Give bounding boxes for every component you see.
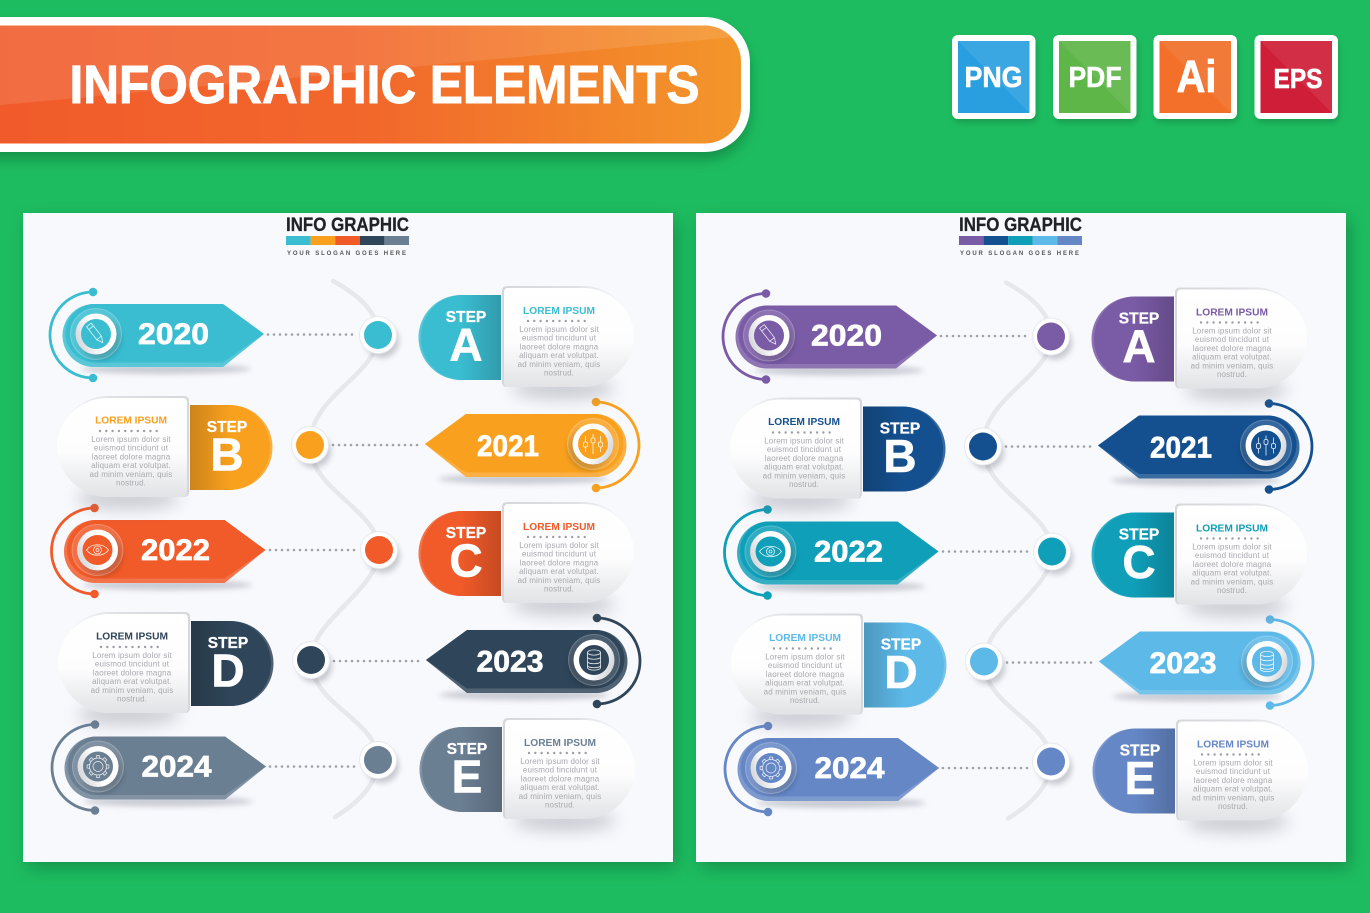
- step C: STEP: [1119, 526, 1159, 544]
- year tag 2021: [1098, 399, 1312, 494]
- year tag 2024: 2024: [142, 750, 212, 784]
- step C: C: [1122, 536, 1156, 588]
- year tag 2020: 2020: [811, 320, 882, 352]
- year tag 2022: 2022: [814, 536, 883, 568]
- panel header: [959, 215, 1082, 257]
- step B: B: [883, 430, 917, 482]
- year tag 2021: 2021: [477, 430, 539, 463]
- step A: STEP: [1119, 310, 1159, 328]
- step A: [1092, 288, 1307, 401]
- step B: B: [210, 428, 244, 480]
- format badge: EPS: EPS: [1274, 63, 1322, 94]
- year tag 2020: 2020: [138, 318, 209, 351]
- format badge: PNG: PNG: [964, 62, 1022, 94]
- step A: A: [449, 318, 483, 370]
- timeline wave: [310, 281, 379, 817]
- format badge: PDF: PDF: [1068, 62, 1122, 94]
- timeline nodes: [964, 318, 1073, 784]
- step B: STEP: [880, 420, 920, 438]
- year tag 2023: [426, 614, 640, 708]
- step A: STEP: [446, 309, 486, 326]
- step B: LOREM IPSUM: [768, 417, 840, 428]
- step B: LOREM IPSUM: [95, 416, 167, 426]
- year tag 2021: 2021: [1150, 432, 1212, 464]
- year tag 2022: 2022: [141, 534, 210, 567]
- step C: [418, 502, 634, 616]
- step E: [420, 718, 635, 832]
- year tag 2022: [52, 504, 266, 598]
- step D: D: [211, 644, 245, 696]
- panel: right infographic: [696, 213, 1350, 868]
- connector: dotted lines: [268, 334, 423, 766]
- title banner: INFOGRAPHIC ELEMENTS: [70, 55, 700, 115]
- panel header: [286, 215, 409, 257]
- step A: LOREM IPSUM: [1196, 308, 1268, 318]
- step C: [1092, 504, 1307, 617]
- step B: [57, 396, 272, 510]
- step D: STEP: [881, 636, 921, 654]
- panel header: INFO GRAPHIC: [959, 215, 1082, 236]
- panel content: [723, 282, 1313, 833]
- step E: STEP: [1120, 742, 1160, 760]
- step D: [731, 614, 946, 727]
- step D: LOREM IPSUM: [96, 632, 168, 642]
- step A: [418, 286, 634, 400]
- year tag 2024: 2024: [814, 752, 885, 785]
- year tag 2023: 2023: [1150, 647, 1216, 680]
- step E: E: [452, 750, 482, 802]
- step C: LOREM IPSUM: [523, 522, 595, 533]
- step D: [58, 612, 274, 726]
- year tag 2024: [725, 722, 939, 816]
- year tag 2023: [1099, 615, 1313, 710]
- format badge: PNG: [952, 35, 1037, 123]
- year tag 2024: [52, 720, 266, 815]
- step C: LOREM IPSUM: [1196, 524, 1268, 534]
- step E: LOREM IPSUM: [524, 738, 596, 749]
- step B: STEP: [207, 419, 247, 436]
- format badge: Ai: [1154, 35, 1238, 123]
- step D: D: [884, 646, 918, 698]
- step E: [1092, 720, 1308, 833]
- step E: LOREM IPSUM: [1197, 740, 1269, 750]
- step C: STEP: [446, 525, 486, 542]
- connector: dotted lines: [941, 336, 1096, 768]
- step C: C: [449, 534, 483, 586]
- format badge: Ai: Ai: [1176, 51, 1216, 102]
- panel: left infographic: [23, 213, 677, 868]
- panel header: INFO GRAPHIC: [286, 215, 409, 236]
- step B: [730, 398, 946, 511]
- panel header: YOUR SLOGAN GOES HERE: [960, 251, 1079, 257]
- step A: A: [1122, 320, 1156, 372]
- step E: STEP: [447, 741, 487, 758]
- year tag 2020: [50, 288, 264, 382]
- format badge: PDF: [1053, 35, 1138, 123]
- step E: E: [1125, 752, 1155, 804]
- format badge: EPS: [1254, 35, 1339, 123]
- title banner: [0, 17, 750, 160]
- year tag 2020: [723, 289, 937, 384]
- year tag 2023: 2023: [476, 646, 544, 678]
- panel header: YOUR SLOGAN GOES HERE: [287, 251, 406, 257]
- step D: LOREM IPSUM: [769, 633, 841, 644]
- year tag 2022: [724, 505, 938, 600]
- step A: LOREM IPSUM: [523, 306, 595, 317]
- timeline nodes: [292, 316, 400, 783]
- year tag 2021: [425, 398, 639, 492]
- step D: STEP: [208, 635, 248, 652]
- timeline wave: [983, 282, 1052, 818]
